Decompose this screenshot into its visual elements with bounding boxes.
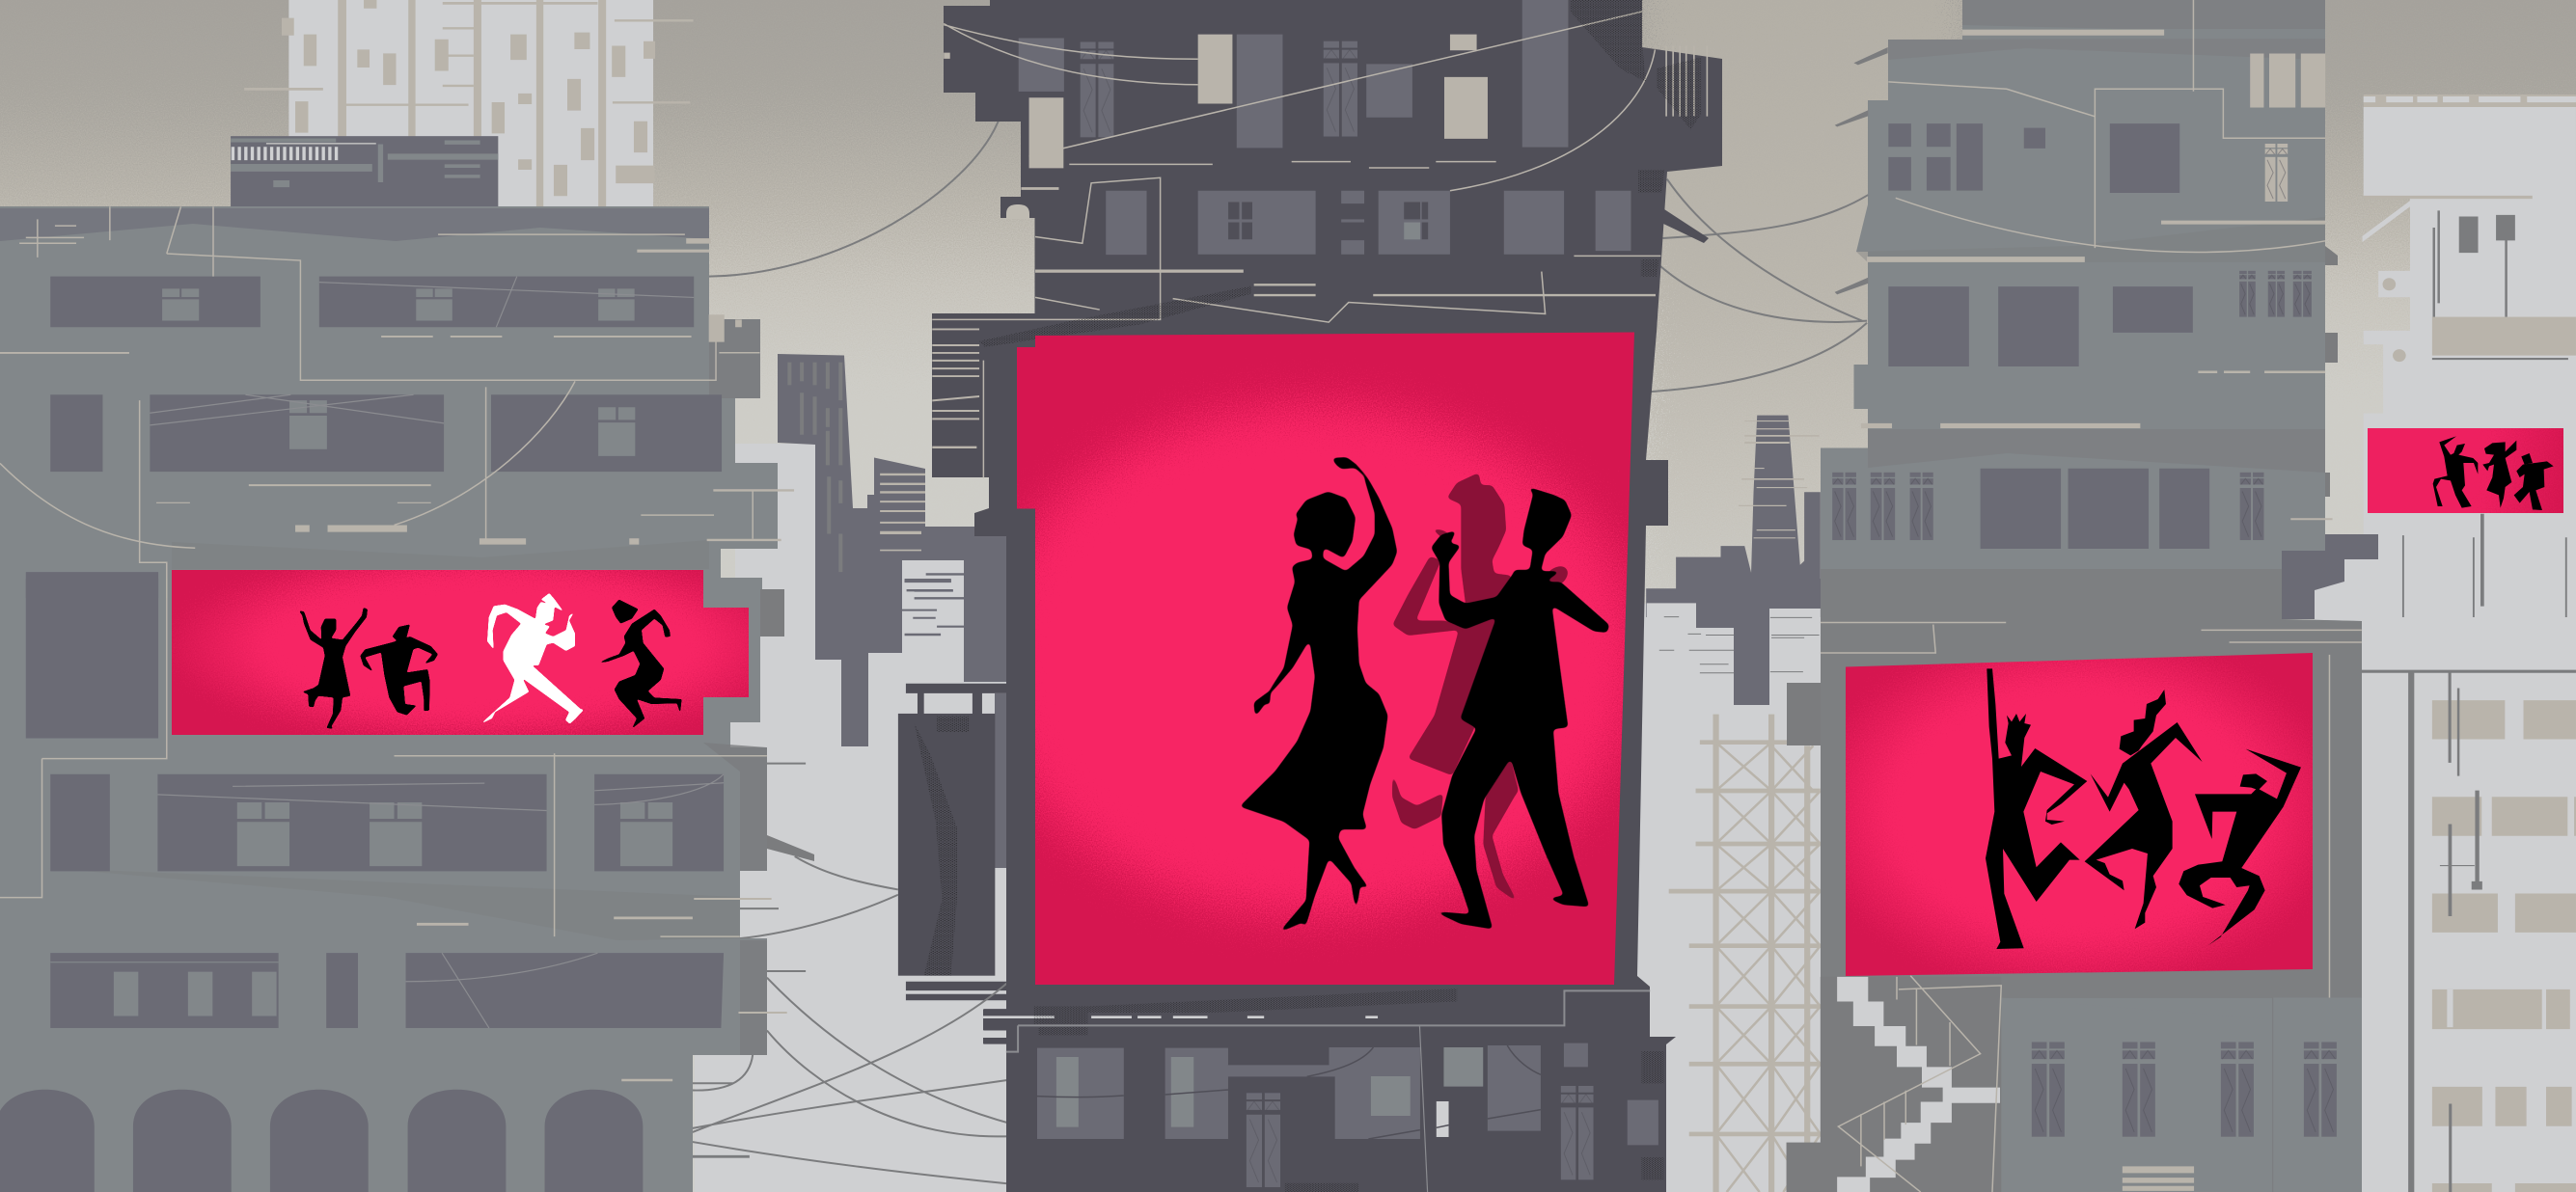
pale tower behind left building [244, 0, 694, 207]
three angular dancers [1986, 668, 2301, 949]
rooftop block [231, 136, 498, 208]
right grey building [1651, 0, 2378, 1192]
three tiny dancers [2433, 436, 2554, 510]
shading bands [1787, 0, 2362, 998]
upper facade [932, 0, 1708, 477]
right red screen [1846, 653, 2313, 976]
small arch opening [1006, 204, 1029, 219]
lower right building [1787, 623, 2362, 1192]
scaffolding [1669, 715, 1821, 1192]
dancer with raised arms [299, 608, 368, 729]
wires over pale buildings [693, 763, 1013, 1184]
shadow dancer [1392, 473, 1572, 903]
four small dancers [299, 593, 682, 729]
block at right edge [2282, 534, 2378, 619]
left grey building [0, 206, 814, 1192]
building shading [0, 208, 814, 1055]
dancer two [2085, 690, 2203, 929]
staircase [1837, 977, 2000, 1192]
striding woman [599, 600, 682, 729]
pale back building, centre right [1631, 604, 1823, 1192]
centre dark building [932, 0, 1722, 1192]
chimney tower and stepped base [1646, 416, 1821, 705]
sky wire left [709, 122, 999, 277]
crouching dancer [360, 624, 438, 716]
lower facade [983, 989, 1663, 1192]
dancing couple [1240, 457, 1609, 933]
upper windows [0, 206, 794, 598]
dancer one [1986, 668, 2087, 949]
small red screen, far right [2368, 428, 2563, 513]
hanging sign [898, 684, 1013, 1044]
man silhouette [1431, 486, 1609, 930]
lower windows and arches [0, 579, 787, 1192]
back tower with stripes [778, 354, 1008, 868]
strut [1661, 209, 1709, 243]
far right pale building [2315, 95, 2576, 1192]
upper windows [1651, 0, 2333, 549]
woman silhouette [1240, 457, 1397, 933]
pale back buildings, centre left [695, 444, 1013, 1192]
dancer three [2179, 749, 2301, 946]
white dancer in cap [480, 593, 584, 724]
left red screen [172, 570, 749, 735]
main red screen [1017, 332, 1634, 985]
